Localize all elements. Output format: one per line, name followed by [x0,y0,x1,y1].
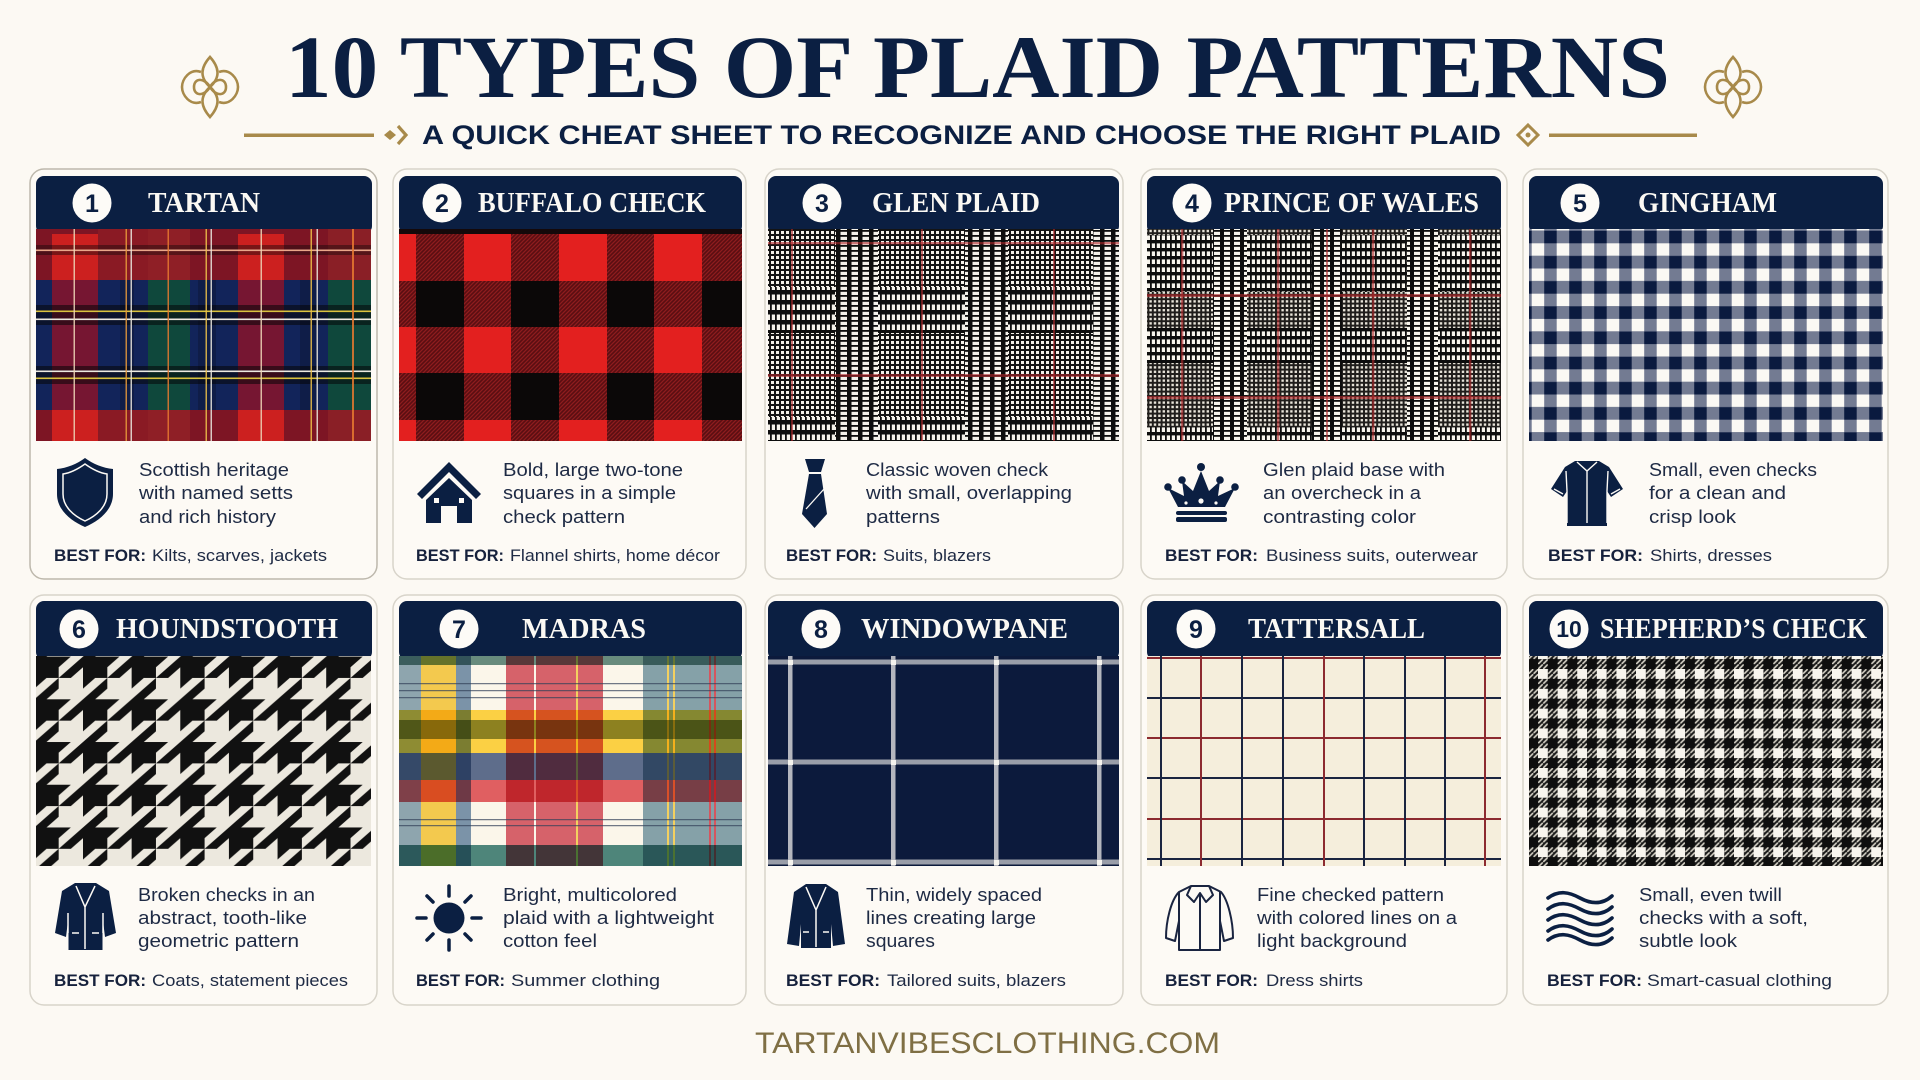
description: crisp look [1649,507,1737,527]
windowpane swatch [768,656,1119,866]
best for: Shirts, dresses [1650,546,1772,565]
subtitle right flourish [1518,125,1697,145]
card frame [765,595,1123,1005]
best for [786,971,1066,990]
number badge: 5 [1573,190,1587,218]
best for [54,546,327,565]
description: geometric pattern [138,931,299,951]
best for [1547,971,1832,990]
card frame [393,595,746,1005]
best for [416,546,720,565]
card frame [765,169,1123,579]
number badge: 3 [815,190,829,218]
icon: blazer [787,884,845,948]
number badge [440,610,478,648]
description: Thin, widely spaced [866,885,1042,905]
card frame [1141,169,1507,579]
heading: TARTAN [148,188,260,219]
description: Glen plaid base with [1263,460,1445,480]
number badge [60,610,98,648]
description: squares in a simple [503,483,676,503]
description [865,460,1072,527]
best for: Dress shirts [1266,971,1363,990]
description: Bold, large two-tone [503,460,683,480]
card frame [30,169,377,579]
description: Small, even twill [1639,885,1782,905]
description: Classic woven check [866,460,1049,480]
best for: Smart-casual clothing [1647,971,1832,990]
gingham swatch [1529,229,1883,441]
card 1: tartan [30,169,377,579]
number badge: 1 [85,190,99,218]
description: Fine checked pattern [1257,885,1444,905]
card 9: tattersall [1141,595,1507,1005]
icon: dress shirt [1166,886,1233,950]
number badge [72,184,112,222]
description [503,460,683,527]
card 4: prince of wales [1141,169,1507,579]
header bar [1147,601,1501,660]
description: with named setts [138,483,293,503]
best for: Flannel shirts, home décor [510,546,720,565]
card 8: windowpane [765,595,1123,1005]
best for: BEST FOR: [1165,546,1258,565]
buffalo check swatch [399,229,742,441]
best for: Summer clothing [511,971,660,990]
card frame [1523,595,1888,1005]
description: abstract, tooth-like [138,908,307,928]
madras swatch [399,656,742,866]
header bar [1147,176,1501,234]
ornament: right [1705,57,1761,117]
description: checks with a soft, [1639,908,1808,928]
card 2: buffalo check [393,169,746,579]
best for: Business suits, outerwear [1266,546,1478,565]
icon: house [417,462,481,523]
header bar [1529,176,1883,234]
best for [1165,971,1363,990]
best for: Tailored suits, blazers [887,971,1066,990]
number badge [1550,610,1588,648]
card frame [1141,595,1507,1005]
best for: Kilts, scarves, jackets [152,546,327,565]
heading: TATTERSALL [1248,614,1425,645]
houndstooth swatch [36,656,371,866]
description: Scottish heritage [139,460,289,480]
description: lines creating large [866,908,1036,928]
best for: BEST FOR: [54,971,146,990]
card 6: houndstooth [30,595,377,1005]
icon: waves [1548,893,1612,945]
icon: tie [802,459,827,528]
number badge [422,184,462,222]
glen plaid swatch [768,229,1119,441]
heading: GINGHAM [1638,188,1777,219]
card 10: shepherd's check [1523,595,1888,1005]
number badge: 10 [1556,616,1582,642]
number badge [1560,184,1600,222]
header bar [768,176,1119,234]
heading: PRINCE OF WALES [1224,188,1479,219]
description: with colored lines on a [1256,908,1458,928]
header bar [1529,601,1883,660]
best for [416,971,660,990]
icon: shield [57,458,113,527]
description: contrasting color [1263,507,1416,527]
heading: BUFFALO CHECK [478,188,706,219]
number badge: 6 [72,616,86,644]
best for [786,546,991,565]
icon: short-sleeve shirt [1551,461,1623,526]
heading: HOUNDSTOOTH [116,614,338,645]
number badge [1172,184,1212,222]
shepherd's check swatch [1529,656,1883,866]
number badge [802,610,840,648]
heading: WINDOWPANE [861,614,1068,645]
card frame [1523,169,1888,579]
best for: BEST FOR: [1548,546,1643,565]
number badge: 2 [435,190,449,218]
card frame [393,169,746,579]
description: patterns [866,507,940,527]
card 3: glen plaid [765,169,1123,579]
best for: BEST FOR: [1547,971,1642,990]
description: and rich history [139,507,276,527]
header bar [36,176,372,234]
card 5: gingham [1523,169,1888,579]
icon: sun [417,886,481,950]
header bar [399,176,742,234]
description [866,885,1042,951]
description: for a clean and [1649,483,1786,503]
ornament: left [182,57,238,117]
description: subtle look [1639,931,1738,951]
best for [1165,546,1478,565]
best for [54,971,348,990]
description: an overcheck in a [1263,483,1422,503]
header bar [768,601,1119,660]
description [138,885,315,951]
best for: BEST FOR: [54,546,146,565]
tartan swatch [36,229,371,441]
description: plaid with a lightweight [503,908,714,928]
best for: BEST FOR: [786,971,880,990]
description: squares [866,931,935,951]
heading: GLEN PLAID [872,188,1040,219]
subtitle: A QUICK CHEAT SHEET TO RECOGNIZE AND CHOOSE THE RIGHT PLAID [422,120,1501,150]
tattersall swatch [1147,656,1501,866]
footer website: TARTANVIBESCLOTHING.COM [755,1027,1220,1060]
number badge: 4 [1185,190,1199,218]
prince of wales swatch [1147,229,1501,441]
description [1639,885,1808,951]
number badge: 7 [452,616,466,644]
description: light background [1257,931,1407,951]
subtitle left flourish [244,126,406,144]
number badge: 9 [1189,616,1203,644]
best for: BEST FOR: [786,546,877,565]
description: check pattern [503,507,625,527]
best for: BEST FOR: [416,971,505,990]
description [503,885,714,951]
title: 10 TYPES OF PLAID PATTERNS [285,19,1670,117]
description [1649,460,1817,527]
number badge [1176,610,1216,648]
icon: crown [1164,463,1239,522]
best for: BEST FOR: [1165,971,1258,990]
description: Bright, multicolored [503,885,677,905]
card frame [30,595,377,1005]
description [1256,885,1458,951]
card 7: madras [393,595,746,1005]
header bar [399,601,742,660]
best for [1548,546,1772,565]
best for: Coats, statement pieces [152,971,348,990]
description: with small, overlapping [865,483,1072,503]
description: Small, even checks [1649,460,1817,480]
header bar [36,601,372,660]
description: Broken checks in an [138,885,315,905]
heading: SHEPHERD’S CHECK [1600,614,1867,645]
number badge: 8 [814,616,828,644]
description: cotton feel [503,931,597,951]
description [138,460,293,527]
icon: coat [55,883,116,950]
best for: BEST FOR: [416,546,504,565]
heading: MADRAS [522,614,646,645]
best for: Suits, blazers [883,546,991,565]
description [1263,460,1445,527]
number badge [802,184,842,222]
